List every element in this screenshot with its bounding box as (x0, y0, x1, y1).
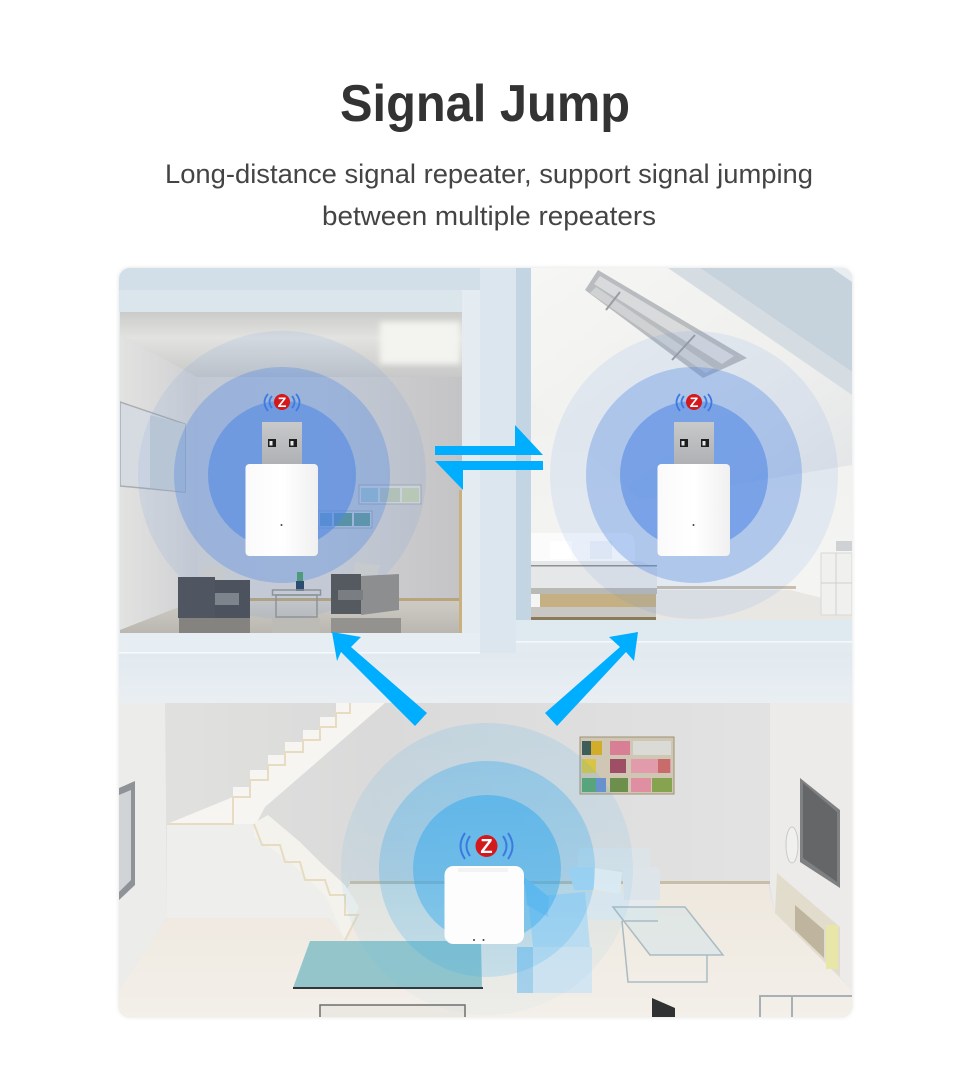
sofa (517, 848, 660, 993)
repeater body (246, 464, 318, 556)
title: Signal Jump (340, 75, 630, 133)
side table and plant (272, 572, 320, 633)
room: downstairs living room (119, 703, 852, 1019)
arrow: gateway to right repeater (545, 632, 638, 726)
bed (531, 533, 657, 620)
wall vase (786, 827, 798, 863)
USB plug (674, 422, 714, 465)
right side wall (770, 703, 852, 990)
foreground furniture (320, 996, 852, 1019)
room: top-left living room (120, 312, 462, 633)
floor (120, 600, 462, 633)
left armchair (178, 567, 250, 633)
building frame (119, 268, 852, 703)
glass coffee table (613, 907, 723, 982)
icon: left Zigbee: Z (278, 394, 287, 410)
staircase (167, 703, 385, 940)
wall shelf lower (318, 511, 372, 528)
icon: right Zigbee (676, 394, 712, 411)
arrow: right (435, 425, 543, 455)
left wall picture (119, 781, 135, 900)
floor (656, 590, 852, 620)
icon: left Zigbee (264, 394, 300, 411)
left wall (119, 703, 167, 990)
arrow: left (435, 461, 543, 490)
signal rings: right repeater (550, 331, 838, 619)
ceiling (120, 312, 462, 377)
panel: house cross-section (119, 268, 852, 1019)
panel shadow (119, 268, 852, 1017)
wall television (800, 778, 840, 888)
device: gateway hub (444, 866, 524, 944)
floor (119, 884, 852, 1017)
wall shelf upper (359, 485, 421, 504)
right armchair (331, 563, 401, 633)
left wall (120, 335, 158, 630)
device: right USB repeater (658, 422, 730, 556)
signal rings: left repeater (138, 331, 426, 619)
window on left wall (120, 402, 185, 492)
upper flight (167, 703, 385, 824)
blue-grey roof window (700, 268, 852, 372)
rug (293, 941, 482, 988)
cabinet (821, 541, 852, 615)
subtitle (165, 159, 813, 231)
left room furniture (178, 563, 401, 633)
repeater body (658, 464, 730, 556)
wall bookcase (580, 737, 674, 794)
subtitle: between multiple repeaters (322, 201, 656, 231)
icon: right Zigbee: Z (690, 394, 699, 410)
arrow: gateway to left repeater (332, 632, 427, 726)
subtitle: Long-distance signal repeater, support signal jumping (165, 159, 813, 189)
icon: gateway Zigbee (460, 833, 512, 859)
lower flight (254, 815, 359, 940)
icon: gateway Zigbee: Z (480, 836, 493, 858)
USB plug (262, 422, 302, 465)
wall beneath stairs (167, 824, 345, 940)
sloped ceiling (799, 406, 852, 473)
ceiling vent (585, 270, 747, 378)
signal rings: gateway (341, 723, 633, 984)
room: top-right bedroom (531, 268, 852, 620)
device: left USB repeater (246, 422, 318, 556)
TV cabinet (775, 873, 840, 977)
